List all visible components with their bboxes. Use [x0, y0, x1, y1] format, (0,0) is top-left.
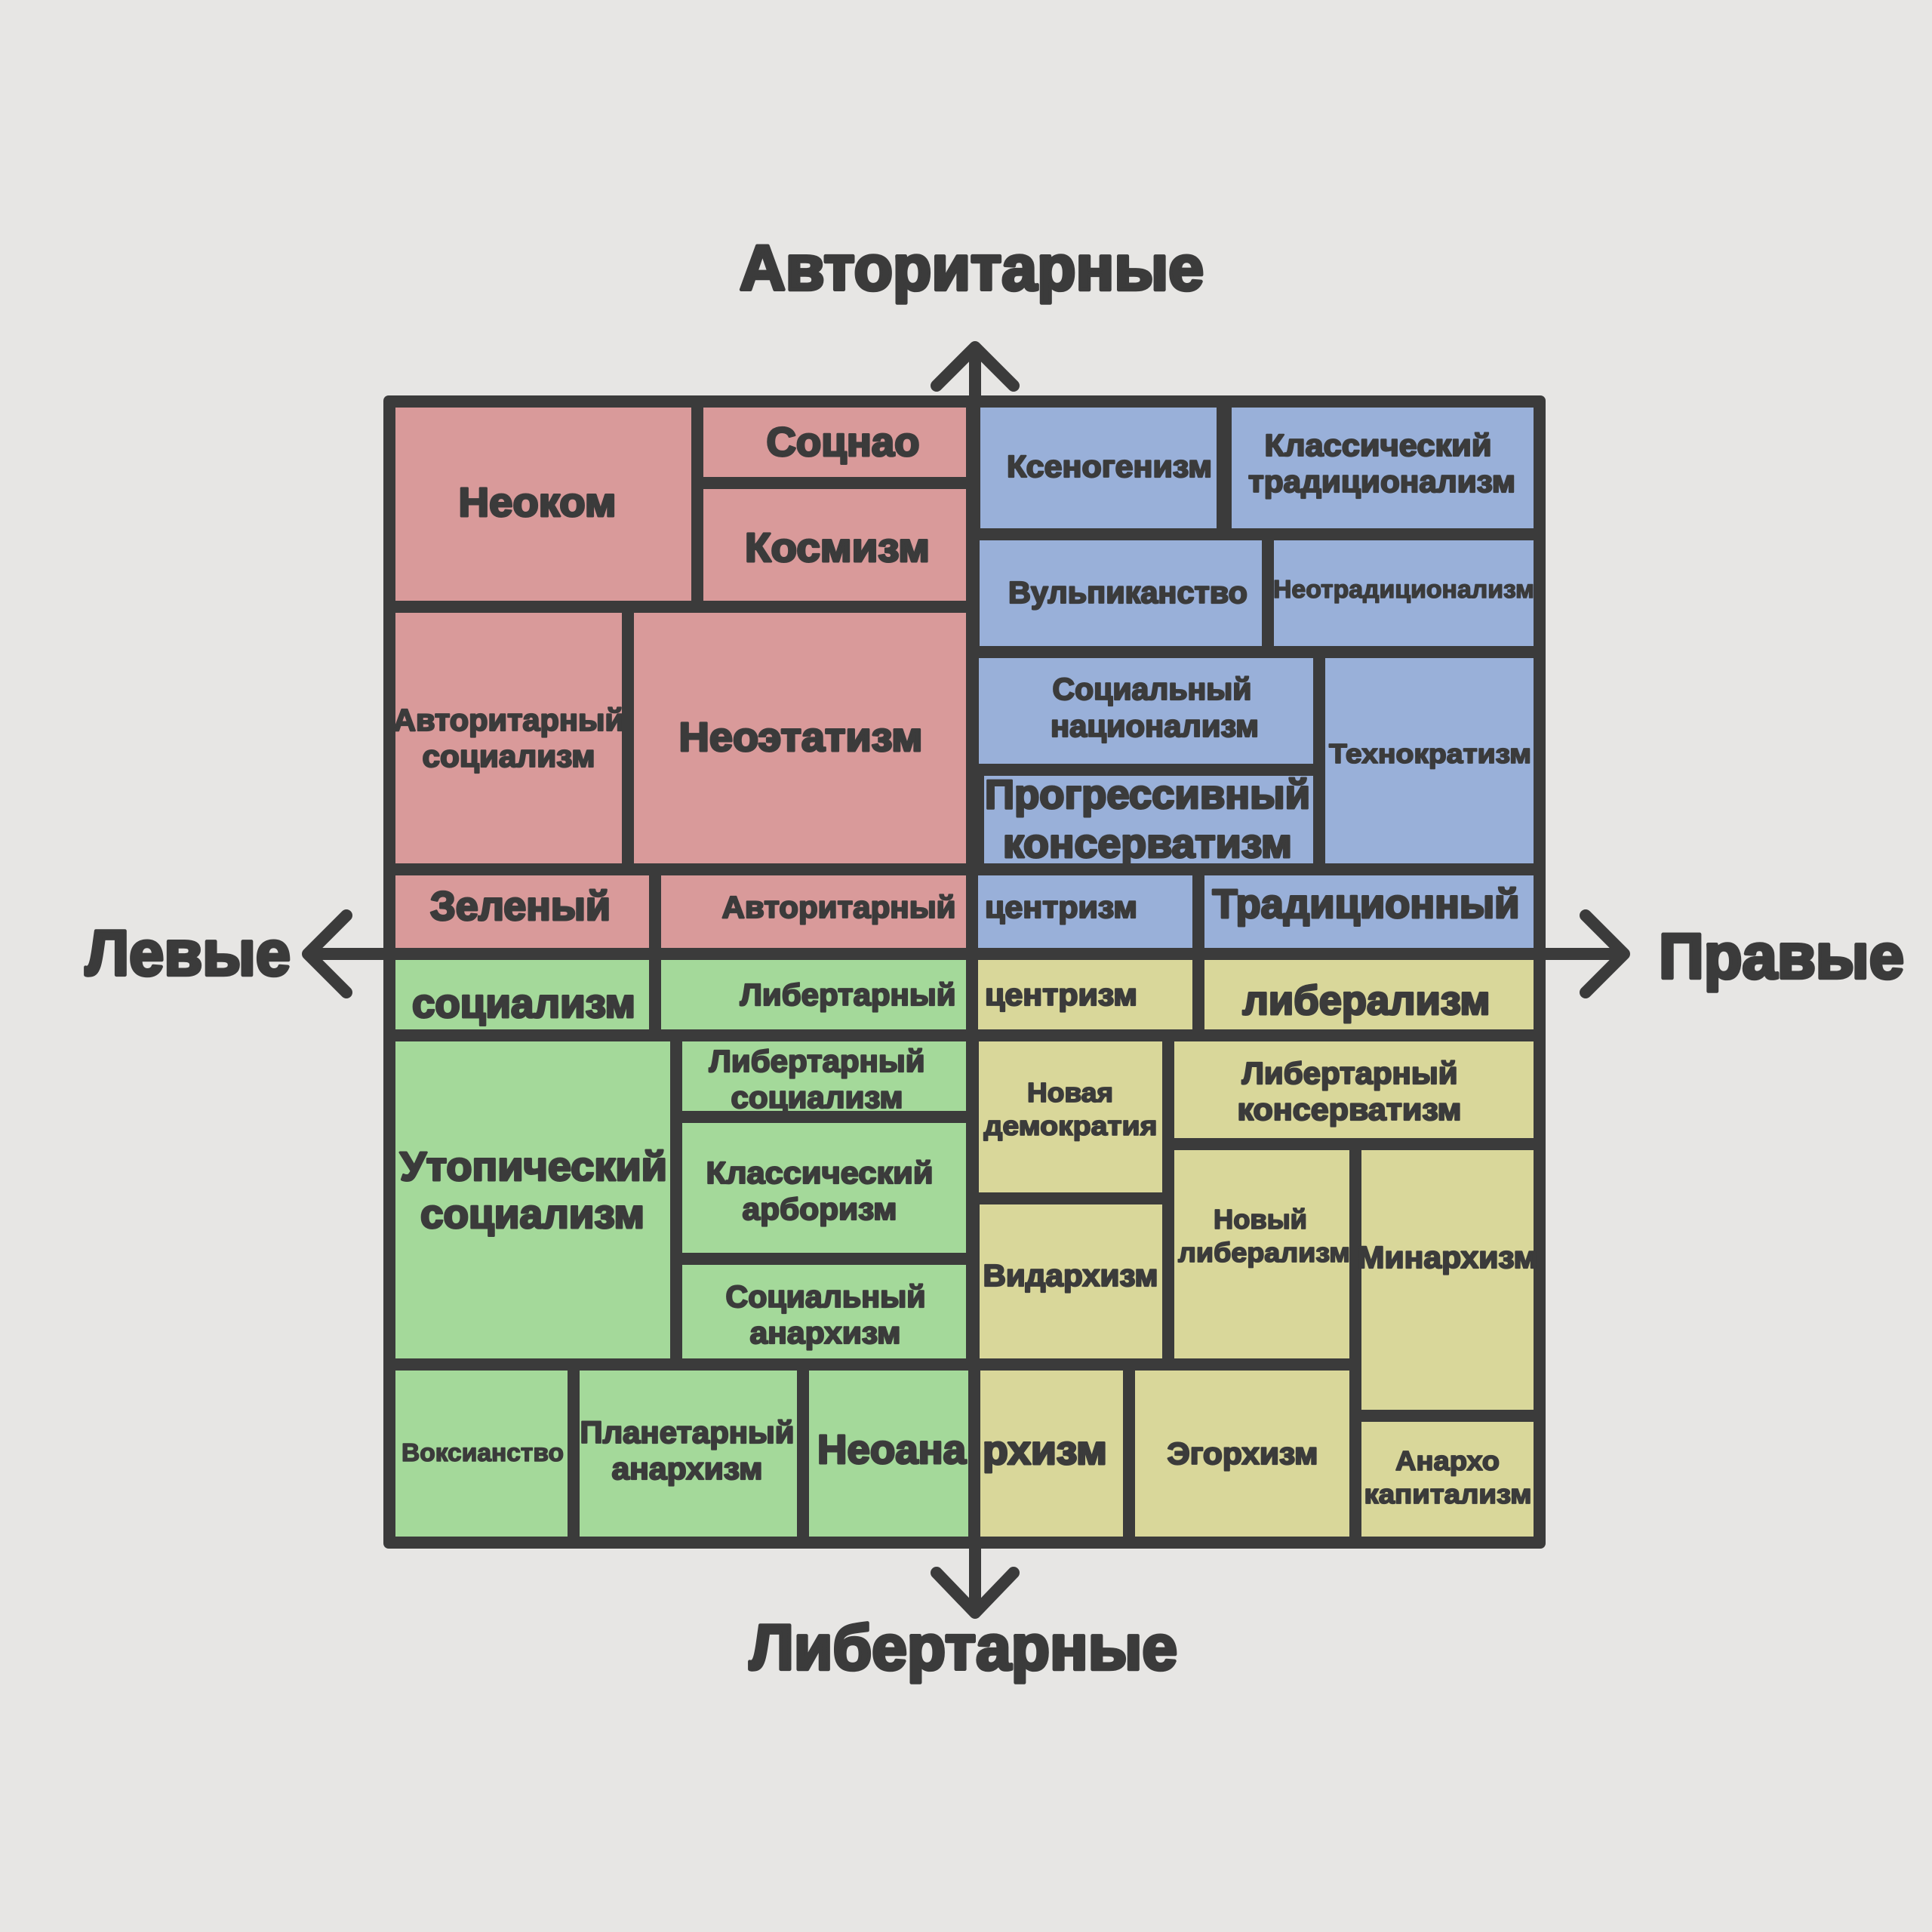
- cell: Либертарный социализм: [682, 1041, 966, 1115]
- cell: социализм: [395, 960, 649, 1029]
- cell: Анархо капитализм: [1361, 1422, 1534, 1537]
- cell: Утопический социализм: Утопический: [400, 1144, 667, 1189]
- cell: Социальный анархизм: анархизм: [750, 1315, 901, 1350]
- heading: top axis label: Авторитарные: [740, 232, 1204, 303]
- panel: authoritarian left quadrant: [393, 408, 966, 948]
- cell: Неоком: Неоком: [459, 480, 616, 525]
- cell: Авторитарный социализм: [393, 613, 624, 863]
- cell: социализм: социализм: [412, 981, 635, 1026]
- arrow: up: [937, 347, 1014, 400]
- cell: центризм (yellow): центризм: [985, 977, 1137, 1012]
- cell: Социальный анархизм: Социальный: [726, 1279, 925, 1314]
- panel: libertarian left quadrant: [395, 960, 968, 1537]
- cell: Классический арборизм: арборизм: [743, 1192, 897, 1226]
- cell: Авторитарный социализм: Авторитарный: [393, 703, 624, 737]
- cell: Видархизм: [980, 1204, 1162, 1358]
- heading: bottom axis label: Либертарные: [749, 1612, 1177, 1683]
- cell: центризм (yellow): [978, 960, 1192, 1029]
- cell: Неоком: [395, 408, 691, 601]
- cell: Утопический социализм: [395, 1041, 670, 1358]
- cell: Социальный национализм: [979, 658, 1313, 764]
- cell: Традиционный: [1204, 875, 1534, 948]
- cell: (Неоана)рхизм: рхизм: [983, 1428, 1107, 1473]
- cell: Неоана(рхизм): Неоана: [817, 1427, 967, 1472]
- cell: Воксианство: Воксианство: [401, 1438, 564, 1466]
- cell: Либертарный консерватизм: Либертарный: [1242, 1056, 1458, 1091]
- cell: Неоэтатизм: Неоэтатизм: [679, 715, 922, 760]
- cell: Неотрадиционализм: Неотрадиционализм: [1273, 575, 1534, 603]
- arrow: left: [308, 915, 389, 992]
- cell: Прогрессивный консерватизм: [984, 772, 1313, 866]
- cell: Классический арборизм: [682, 1123, 966, 1253]
- cell: Минархизм: [1358, 1150, 1537, 1410]
- cell: Авторитарный: [661, 875, 966, 948]
- cell: Планетарный анархизм: [580, 1371, 797, 1537]
- arrow: right: [1540, 915, 1624, 992]
- cell: Либертарный консерватизм: [1174, 1041, 1534, 1138]
- cell: Анархо капитализм: капитализм: [1364, 1478, 1532, 1509]
- cell: центризм (blue): центризм: [985, 890, 1137, 924]
- heading: right axis label: Правые: [1659, 921, 1904, 992]
- cell: Эгорхизм: [1135, 1371, 1349, 1537]
- cell: Новая демократия: Новая: [1027, 1077, 1113, 1108]
- cell: Классический традиционализм: Классический: [1265, 428, 1491, 463]
- cell: Авторитарный: Авторитарный: [721, 890, 955, 924]
- cell: Новая демократия: [979, 1041, 1162, 1192]
- cell: Социальный национализм: национализм: [1051, 709, 1259, 743]
- cell: Соцнао: [703, 408, 966, 477]
- cell: Планетарный анархизм: Планетарный: [580, 1415, 794, 1450]
- cell: Классический традиционализм: [1232, 408, 1534, 528]
- cell: Анархо капитализм: Анархо: [1395, 1445, 1500, 1476]
- cell: Классический традиционализм: традиционализм: [1248, 464, 1515, 499]
- cell: Социальный анархизм: [682, 1265, 966, 1358]
- cell: Либертарный социализм: социализм: [731, 1080, 903, 1115]
- cell: Авторитарный социализм: социализм: [423, 739, 595, 774]
- cell: Технократизм: [1325, 658, 1534, 863]
- cell: Технократизм: Технократизм: [1329, 738, 1531, 769]
- cell: Космизм: Космизм: [745, 525, 930, 571]
- cell: Минархизм: Минархизм: [1358, 1240, 1537, 1275]
- cell: либерализм: либерализм: [1242, 978, 1490, 1023]
- cell: Утопический социализм: социализм: [420, 1192, 645, 1237]
- cell: Новый либерализм: либерализм: [1178, 1237, 1350, 1268]
- cell: Зеленый: Зеленый: [430, 884, 611, 929]
- cell: либерализм: [1204, 960, 1534, 1029]
- cell: Видархизм: Видархизм: [983, 1258, 1158, 1293]
- cell: Планетарный анархизм: анархизм: [611, 1451, 762, 1486]
- cell: Неоана(рхизм): [809, 1371, 968, 1537]
- cell: Новый либерализм: [1174, 1150, 1350, 1358]
- cell: центризм (blue): [978, 875, 1192, 948]
- cell: Прогрессивный консерватизм: Прогрессивный: [985, 772, 1310, 817]
- cell: Либертарный: Либертарный: [740, 977, 955, 1012]
- cell: (Неоана)рхизм: [980, 1371, 1123, 1537]
- cell: Зеленый: [395, 875, 649, 948]
- cell: Классический арборизм: Классический: [706, 1155, 933, 1190]
- cell: Либертарный консерватизм: консерватизм: [1238, 1092, 1461, 1127]
- arrow: down: [937, 1544, 1014, 1613]
- cell: Соцнао: Соцнао: [767, 420, 919, 465]
- cell: Неоэтатизм: [634, 613, 966, 863]
- heading: left axis label: Левые: [85, 918, 291, 989]
- cell: Вульпиканство: Вульпиканство: [1008, 575, 1247, 610]
- cell: Новая демократия: демократия: [984, 1110, 1158, 1141]
- cell: Традиционный: Традиционный: [1212, 881, 1520, 927]
- cell: Либертарный социализм: Либертарный: [709, 1044, 925, 1078]
- cell: Ксеногенизм: Ксеногенизм: [1007, 449, 1212, 484]
- panel: authoritarian right quadrant: [978, 408, 1534, 948]
- cell: Вульпиканство: [980, 540, 1262, 646]
- cell: Новый либерализм: Новый: [1214, 1204, 1307, 1235]
- cell: Эгорхизм: Эгорхизм: [1167, 1436, 1318, 1471]
- cell: Космизм: [703, 489, 966, 601]
- cell: Ксеногенизм: [980, 408, 1217, 528]
- panel: libertarian right quadrant: [978, 960, 1537, 1537]
- cell: Социальный национализм: Социальный: [1052, 672, 1251, 706]
- cell: Прогрессивный консерватизм: консерватизм: [1003, 821, 1292, 866]
- cell: Неотрадиционализм: [1273, 540, 1534, 646]
- cell: Воксианство: [395, 1371, 568, 1537]
- cell: Либертарный: [661, 960, 966, 1029]
- chart frame: [383, 395, 1546, 1549]
